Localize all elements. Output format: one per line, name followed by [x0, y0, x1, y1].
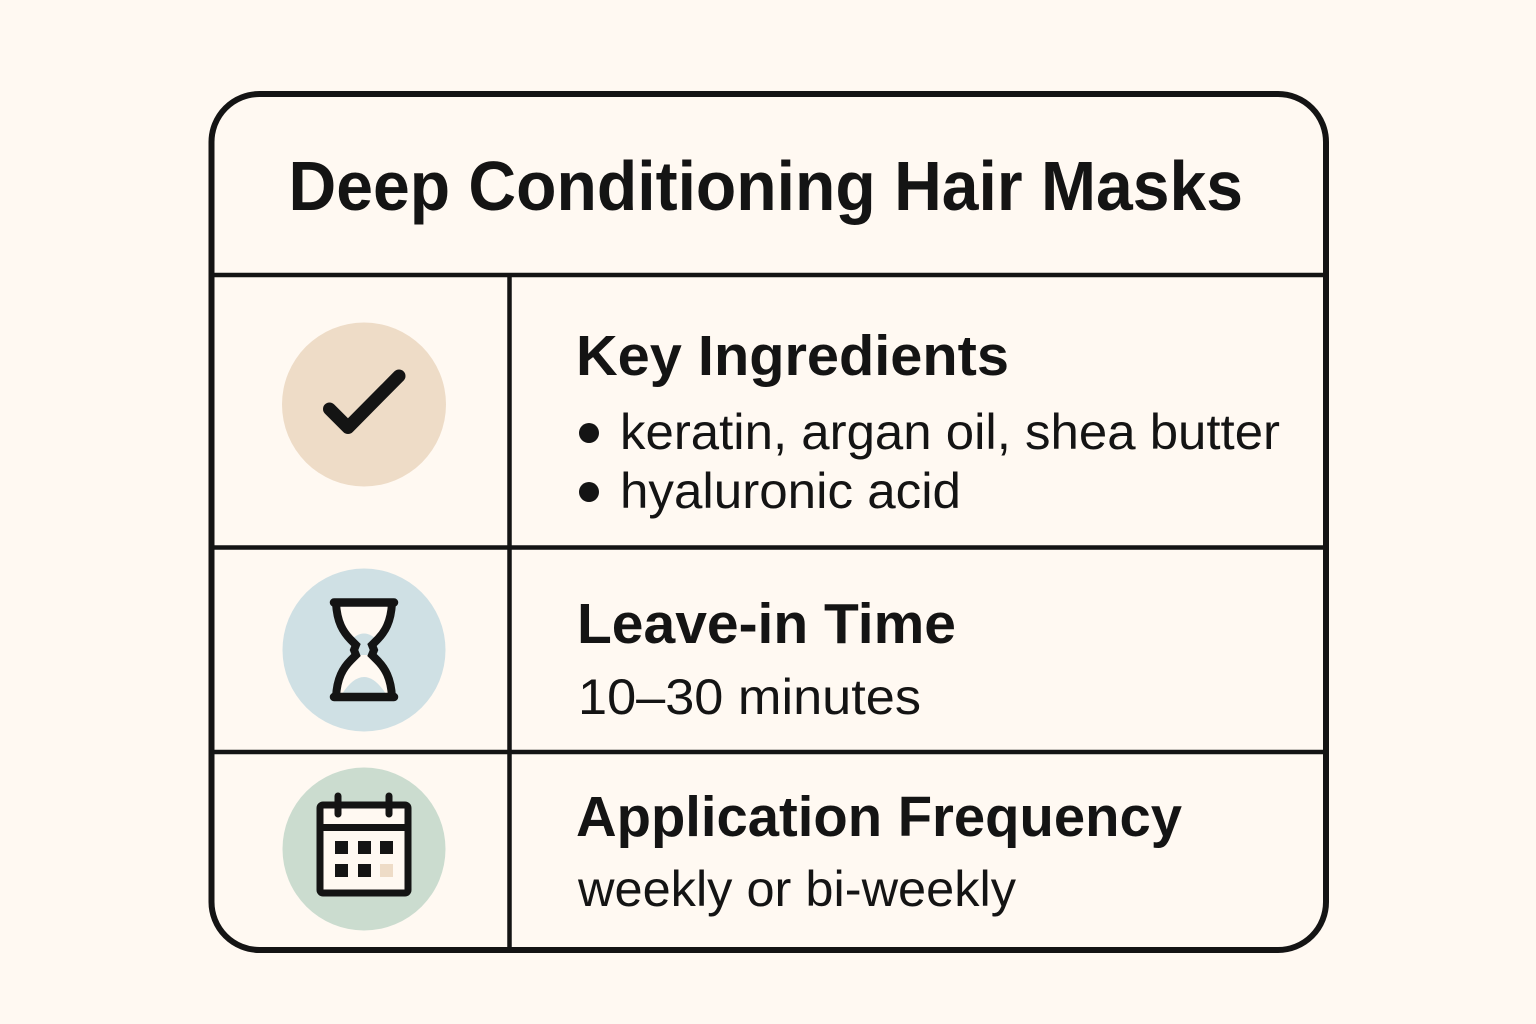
icon: hourglass in blue circle	[282, 568, 446, 732]
icon: check mark in beige circle	[282, 322, 446, 486]
ingredient list	[579, 404, 1280, 519]
icon: calendar in green circle	[282, 768, 446, 930]
panel: hair mask table	[212, 94, 1326, 950]
heading: key ingredients: Key Ingredients	[576, 324, 1009, 388]
row: leave-in time	[282, 568, 956, 732]
row: application frequency	[282, 768, 1182, 930]
title: Deep Conditioning Hair Masks	[288, 147, 1243, 225]
text: duration: 10–30 minutes	[578, 669, 921, 725]
heading: application frequency: Application Frequency	[576, 785, 1182, 849]
table frame	[212, 94, 1326, 950]
ingredient list: keratin, argan oil, shea butter	[620, 404, 1280, 460]
ingredient list: hyaluronic acid	[620, 463, 961, 519]
text: frequency: weekly or bi-weekly	[577, 861, 1016, 917]
heading: leave-in time: Leave-in Time	[577, 592, 956, 656]
row: key ingredients	[282, 322, 1280, 519]
